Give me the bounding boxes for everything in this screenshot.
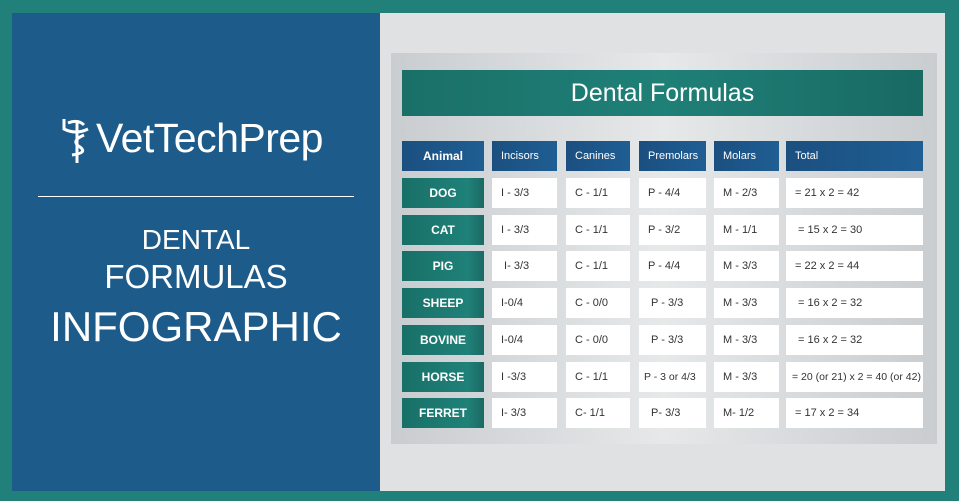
row: bovine: I-0/4 bbox=[501, 334, 523, 346]
table bbox=[402, 141, 923, 428]
row: sheep: P - 3/3 bbox=[651, 297, 683, 309]
row: dog: DOG bbox=[429, 186, 457, 200]
header row: Incisors bbox=[501, 150, 539, 162]
row: ferret: C- 1/1 bbox=[575, 407, 605, 419]
row: cat: C - 1/1 bbox=[575, 224, 608, 236]
row: bovine bbox=[402, 325, 923, 355]
row: bovine: M - 3/3 bbox=[723, 334, 757, 346]
header row: Total bbox=[795, 150, 818, 162]
row: pig: = 22 x 2 = 44 bbox=[795, 260, 859, 272]
heading: dental formulas: DENTAL bbox=[142, 224, 250, 255]
row: bovine: C - 0/0 bbox=[575, 334, 608, 346]
row: sheep: = 16 x 2 = 32 bbox=[798, 297, 862, 309]
row: pig: PIG bbox=[433, 259, 453, 273]
left panel bbox=[12, 13, 380, 491]
row: sheep: I-0/4 bbox=[501, 297, 523, 309]
heading: dental formulas: FORMULAS bbox=[104, 258, 288, 295]
row: dog: I - 3/3 bbox=[501, 187, 529, 199]
row: dog: C - 1/1 bbox=[575, 187, 608, 199]
row: sheep: C - 0/0 bbox=[575, 297, 608, 309]
row: bovine: P - 3/3 bbox=[651, 334, 683, 346]
row: cat: P - 3/2 bbox=[648, 224, 680, 236]
row: pig: I- 3/3 bbox=[504, 260, 529, 272]
row: ferret bbox=[402, 398, 923, 428]
row: horse bbox=[402, 362, 923, 392]
icon: caduceus bbox=[62, 119, 89, 163]
table card bbox=[391, 53, 937, 444]
row: cat: = 15 x 2 = 30 bbox=[798, 224, 862, 236]
row: bovine: = 16 x 2 = 32 bbox=[798, 334, 862, 346]
heading: dental formulas bbox=[50, 224, 342, 350]
row: horse: = 20 (or 21) x 2 = 40 (or 42) bbox=[792, 371, 921, 383]
heading: dental formulas: INFOGRAPHIC bbox=[50, 303, 342, 350]
header row bbox=[402, 141, 923, 171]
row: dog: = 21 x 2 = 42 bbox=[795, 187, 859, 199]
row: ferret: I- 3/3 bbox=[501, 407, 526, 419]
row: cat: CAT bbox=[431, 223, 455, 237]
row: sheep: M - 3/3 bbox=[723, 297, 757, 309]
row: pig: M - 3/3 bbox=[723, 260, 757, 272]
row: horse: M - 3/3 bbox=[723, 371, 757, 383]
row: ferret: FERRET bbox=[419, 406, 467, 420]
row: horse: I -3/3 bbox=[501, 371, 526, 383]
title bar bbox=[402, 70, 923, 116]
row: pig bbox=[402, 251, 923, 281]
title bar: Dental Formulas bbox=[571, 78, 754, 106]
row: horse: C - 1/1 bbox=[575, 371, 608, 383]
row: sheep: SHEEP bbox=[423, 296, 463, 310]
row: ferret: P- 3/3 bbox=[651, 407, 680, 419]
row: cat: M - 1/1 bbox=[723, 224, 757, 236]
row: dog: M - 2/3 bbox=[723, 187, 757, 199]
row: bovine: BOVINE bbox=[420, 333, 466, 347]
logo text: VetTechPrep bbox=[96, 115, 323, 161]
row: ferret: = 17 x 2 = 34 bbox=[795, 407, 859, 419]
row: cat bbox=[402, 215, 923, 245]
row: pig: C - 1/1 bbox=[575, 260, 608, 272]
header row: Animal bbox=[423, 149, 463, 163]
header row: Canines bbox=[575, 150, 615, 162]
header row: Molars bbox=[723, 150, 756, 162]
row: dog bbox=[402, 178, 923, 208]
row: dog: P - 4/4 bbox=[648, 187, 680, 199]
row: ferret: M- 1/2 bbox=[723, 407, 754, 419]
row: sheep bbox=[402, 288, 923, 318]
right panel bbox=[380, 13, 945, 491]
logo bbox=[62, 115, 323, 163]
row: horse: P - 3 or 4/3 bbox=[644, 371, 696, 383]
row: cat: I - 3/3 bbox=[501, 224, 529, 236]
header row: Premolars bbox=[648, 150, 698, 162]
row: pig: P - 4/4 bbox=[648, 260, 680, 272]
row: horse: HORSE bbox=[422, 370, 464, 384]
